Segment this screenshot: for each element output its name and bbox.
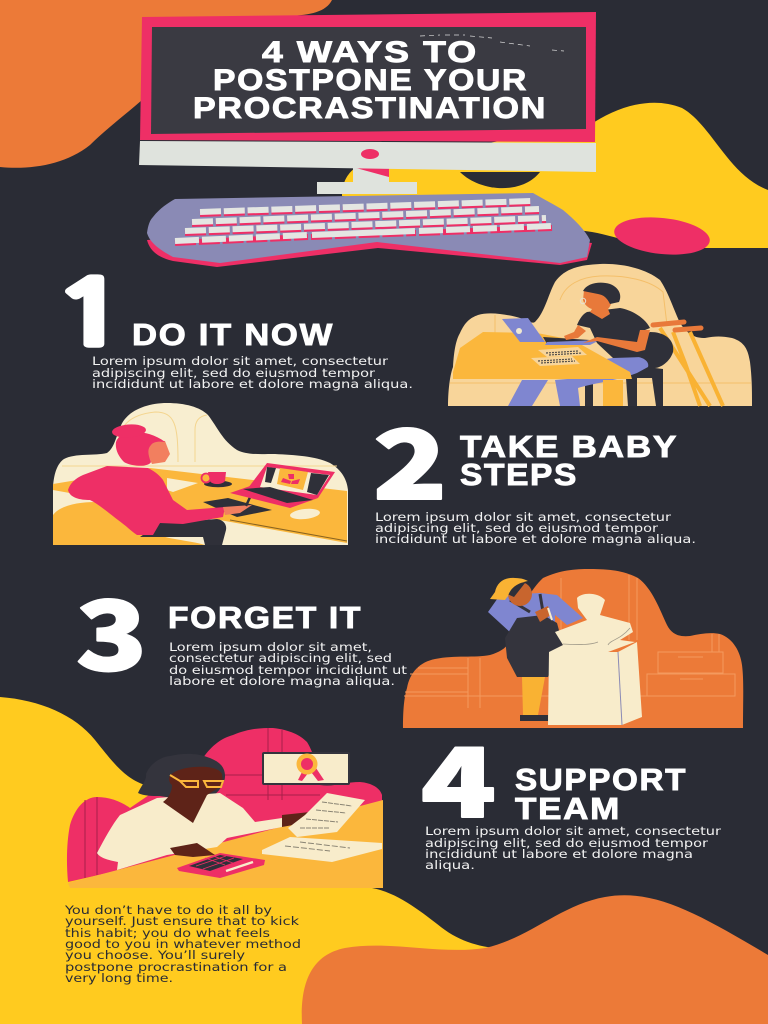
pants <box>522 677 545 715</box>
title: POSTPONE YOUR <box>213 64 528 97</box>
background blob: orange bottom right <box>302 895 768 1024</box>
step 1 heading: DO IT NOW <box>132 317 334 352</box>
hand with pen <box>223 505 252 515</box>
desk <box>53 468 347 543</box>
closing text: you choose. You’ll surely <box>65 948 245 962</box>
step 4 heading <box>515 762 687 826</box>
head <box>583 289 611 319</box>
step 1 text: Lorem ipsum dolor sit amet, consectetur <box>92 354 388 368</box>
desk <box>68 800 383 888</box>
step 2 text <box>375 510 696 546</box>
laptop <box>230 485 318 508</box>
pants <box>140 519 226 545</box>
step 2 heading: STEPS <box>460 457 578 492</box>
arms <box>583 330 650 352</box>
monitor bezel <box>139 141 596 172</box>
step 4 text <box>425 824 721 872</box>
background blob: pink ellipse <box>612 213 712 259</box>
head <box>147 440 170 464</box>
calculator <box>177 853 265 878</box>
closing text: You don’t have to do it all by <box>64 903 272 917</box>
step 3 text: Lorem ipsum dolor sit amet, <box>169 640 372 654</box>
paper stack <box>262 837 382 862</box>
background blob: yellow top right <box>342 103 768 250</box>
step 3 heading: FORGET IT <box>168 600 362 635</box>
step 3 text: labore et dolore magna aliqua. <box>169 674 395 688</box>
left hand <box>170 843 215 857</box>
step 4 text: incididunt ut labore et dolore magna <box>425 847 693 861</box>
backdrop blob <box>448 264 752 406</box>
step 4 text: Lorem ipsum dolor sit amet, consectetur <box>425 824 721 838</box>
step 3 text: do eiusmod tempor incididunt ut <box>169 663 408 677</box>
closing text: postpone procrastination for a <box>65 960 287 974</box>
right hand <box>282 812 310 827</box>
step 3 number: 3 <box>76 559 147 698</box>
keyboard keys <box>175 201 552 243</box>
pink backdrop <box>67 728 382 882</box>
backdrop blob <box>403 569 743 728</box>
hair <box>138 754 225 799</box>
background blob: orange top left <box>0 0 332 168</box>
step 2 text: incididunt ut labore et dolore magna aliqua. <box>375 532 696 546</box>
icon: desktop monitor with keyboard <box>139 12 596 267</box>
step 1 text: incididunt ut labore et dolore magna aliqua. <box>92 377 413 391</box>
shirt <box>577 308 650 358</box>
illustration: woman at tablet and laptop <box>53 403 348 545</box>
step 4 heading: TEAM <box>515 791 621 826</box>
step 3 text: consectetur adipiscing elit, sed <box>169 651 392 665</box>
tablet <box>203 498 272 517</box>
closing text: good to you in whatever method <box>65 937 301 951</box>
crutches <box>653 322 723 406</box>
step 2 number: 2 <box>373 388 447 527</box>
papers <box>538 347 587 357</box>
sheet of paper <box>167 478 198 492</box>
step 1 number: 1 <box>52 270 130 359</box>
title: 4 WAYS TO <box>262 36 478 69</box>
closing text <box>64 903 301 985</box>
closing text: very long time. <box>65 971 173 985</box>
step 1 text: adipiscing elit, sed do eiusmod tempor <box>92 366 375 380</box>
statue plinth <box>548 642 642 725</box>
head <box>508 582 532 606</box>
step 2 heading <box>460 429 678 492</box>
closing text: yourself. Just ensure that to kick <box>65 914 299 928</box>
legs <box>508 356 648 406</box>
keyboard body <box>147 225 592 267</box>
sweater <box>68 466 225 535</box>
illustration: man at laptop with crutches <box>448 264 752 406</box>
title <box>193 35 564 125</box>
backdrop blob <box>53 403 348 545</box>
step 2 text: Lorem ipsum dolor sit amet, consectetur <box>375 510 671 524</box>
illustration: accountant with calculator <box>67 728 383 888</box>
held document <box>288 793 365 837</box>
chair <box>53 502 205 545</box>
monitor screen <box>151 27 586 134</box>
desk <box>453 332 632 379</box>
face and neck <box>163 767 223 823</box>
illustration: sculptor with statue <box>403 569 743 728</box>
monitor stand <box>353 166 389 183</box>
step 4 text: aliqua. <box>425 858 475 872</box>
monitor frame <box>140 12 596 142</box>
title: PROCRASTINATION <box>193 92 547 125</box>
background blob: yellow bottom left <box>0 697 530 1024</box>
statue bust <box>549 594 635 655</box>
step 4 number: 4 <box>421 706 496 845</box>
shoe <box>520 715 548 721</box>
step 4 heading: SUPPORT <box>515 762 687 797</box>
chisel hand <box>535 606 551 622</box>
shirt <box>488 593 583 635</box>
glasses <box>170 775 223 787</box>
step 1 text <box>92 354 413 391</box>
apron <box>505 615 563 677</box>
step 4 text: adipiscing elit, sed do eiusmod tempor <box>425 836 708 850</box>
chair <box>585 332 673 406</box>
step 3 text <box>169 640 408 688</box>
cup and saucer <box>204 481 232 487</box>
laptop <box>502 318 545 342</box>
mouse <box>290 507 320 521</box>
blouse <box>97 793 282 870</box>
step 2 heading: TAKE BABY <box>460 429 678 464</box>
closing text: this habit; you do what feels <box>65 926 270 940</box>
certificate <box>262 752 350 785</box>
step 2 text: adipiscing elit, sed do eiusmod tempor <box>375 521 658 535</box>
